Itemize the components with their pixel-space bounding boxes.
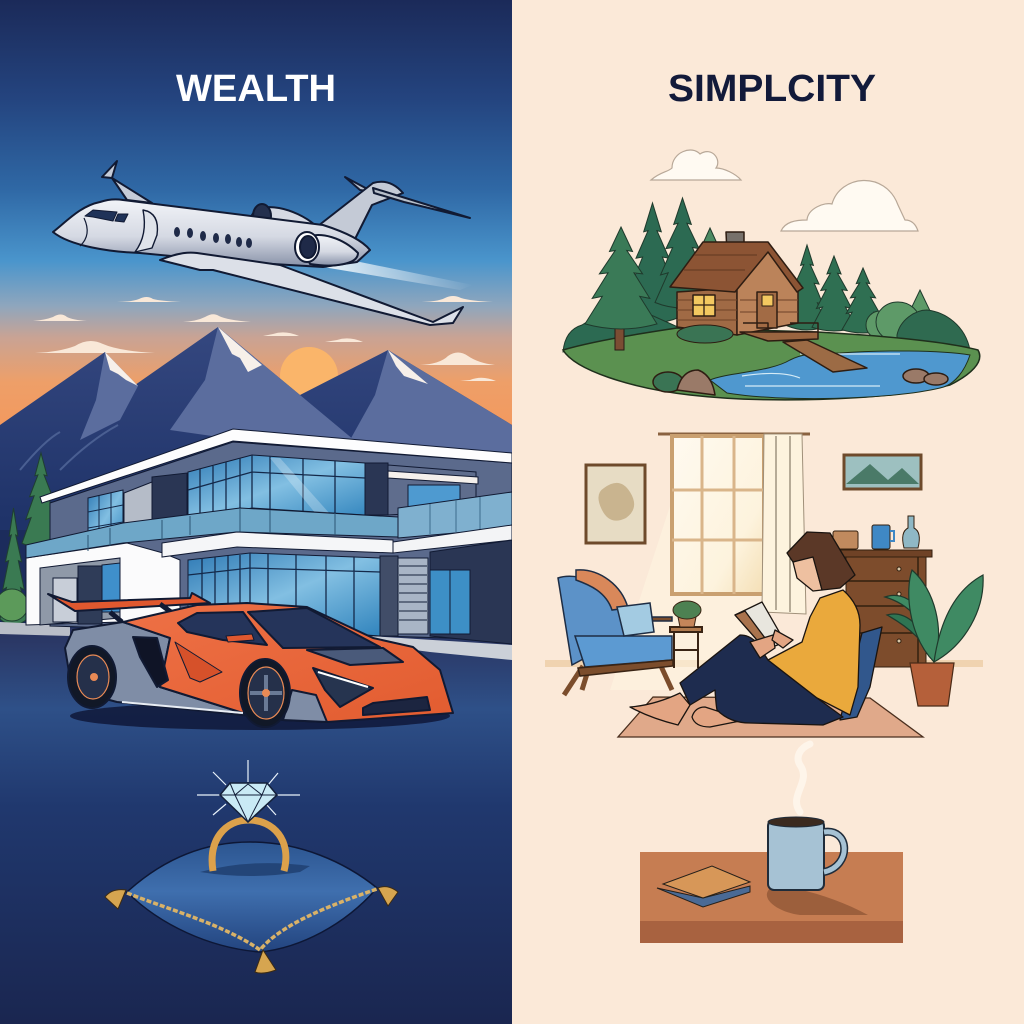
orange body bbox=[123, 603, 453, 722]
heading: wealth: WEALTH bbox=[176, 68, 336, 110]
person reading bbox=[630, 532, 882, 727]
light beam bbox=[610, 500, 764, 690]
right upper bbox=[388, 465, 476, 515]
facade backdrop bbox=[50, 442, 512, 640]
left white wall bbox=[26, 543, 180, 625]
steam bbox=[797, 744, 810, 812]
dresser bbox=[833, 516, 932, 667]
clouds bbox=[33, 296, 496, 381]
balcony bbox=[26, 508, 398, 558]
trees bbox=[0, 453, 75, 625]
armchair bbox=[558, 570, 673, 695]
ring band bbox=[212, 820, 286, 871]
wall art bbox=[586, 455, 921, 543]
curtain rod and window bbox=[658, 434, 810, 614]
side table and plant bbox=[670, 601, 702, 668]
right balcony bbox=[398, 492, 512, 538]
grey rear bbox=[65, 622, 327, 722]
icon: cabin bbox=[653, 232, 948, 395]
icon: books bbox=[657, 866, 750, 907]
upper glass bbox=[188, 455, 365, 520]
desk bbox=[640, 744, 903, 943]
pine trees bbox=[563, 198, 970, 352]
upper left glass bbox=[88, 490, 123, 547]
clouds bbox=[651, 150, 918, 231]
icon: coffee mug bbox=[768, 817, 844, 890]
heading: simplicity: SIMPLCITY bbox=[668, 68, 876, 110]
rug bbox=[618, 697, 923, 737]
island bbox=[563, 328, 980, 400]
floor slab bbox=[162, 532, 393, 557]
big pine bbox=[585, 227, 657, 350]
panel: wealth bbox=[0, 0, 512, 1024]
plant bbox=[885, 570, 983, 706]
icon: diamond ring bbox=[105, 760, 398, 973]
panel: simplicity bbox=[512, 0, 1024, 1024]
icon: sports car bbox=[48, 593, 453, 730]
sun bbox=[280, 347, 338, 405]
lake bbox=[710, 351, 970, 399]
icon: modern mansion bbox=[26, 429, 512, 644]
icon: private jet bbox=[53, 161, 473, 325]
room floor line bbox=[545, 660, 983, 667]
lower glass bbox=[188, 553, 380, 636]
roof bbox=[40, 429, 512, 503]
mountains bbox=[0, 327, 512, 530]
ground: road bbox=[0, 628, 512, 1024]
pillow bbox=[127, 842, 377, 952]
